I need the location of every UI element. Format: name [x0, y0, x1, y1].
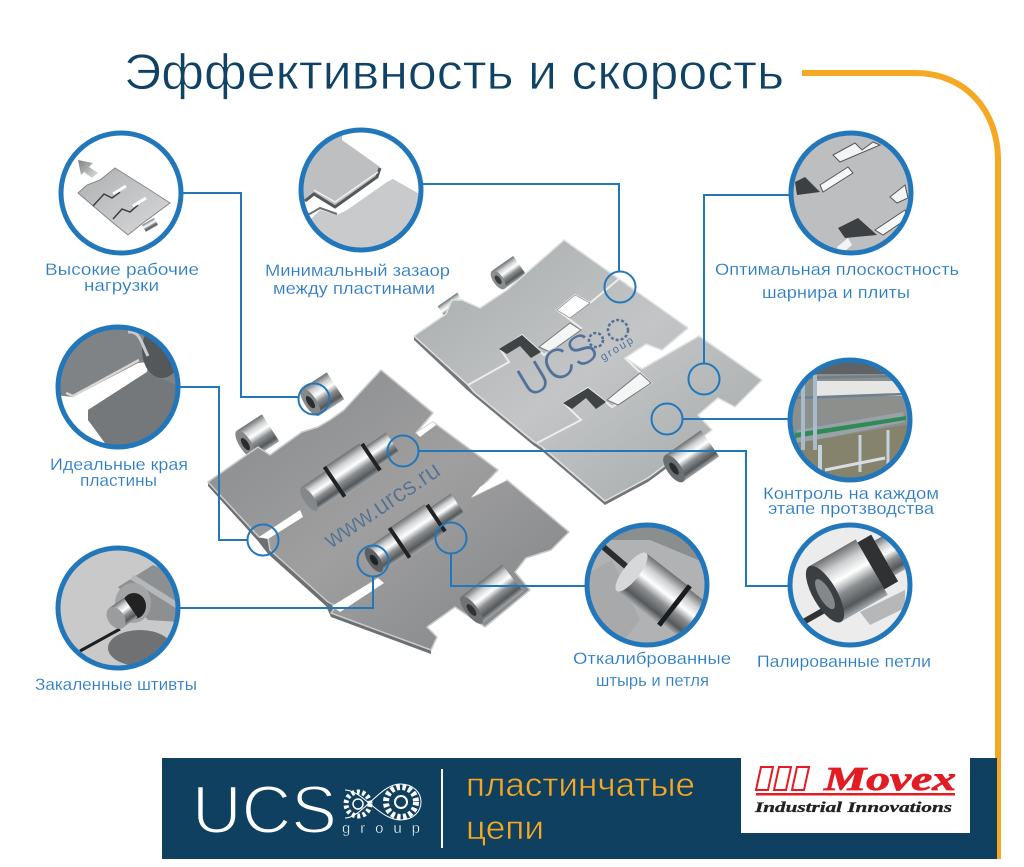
label: minimal gap: Минимальный зазаор [265, 261, 450, 280]
label: flatness: Оптимальная плоскостность [715, 260, 959, 279]
logo: Movex: Industrial Innovations [754, 800, 952, 816]
footer band [162, 757, 997, 859]
icon: perfect edges [55, 322, 182, 450]
label: minimal gap [265, 261, 450, 298]
plate silhouette [414, 240, 762, 501]
knuckle: right [297, 372, 344, 419]
label: polished loops: Палированные петли [757, 652, 931, 671]
knuckle: second [438, 293, 466, 319]
logo: Movex: Movex [823, 761, 956, 798]
label: hardened pins: Закаленные штивты [35, 675, 197, 694]
product title: пластинчатые [466, 766, 695, 803]
chain: left assembly [208, 370, 569, 654]
icon: factory line [785, 355, 915, 485]
label: high load: нагрузки [84, 276, 159, 295]
label: flatness: шарнира и плиты [762, 283, 910, 302]
logo: UCS group: group [342, 820, 420, 837]
icon: minimal gap [298, 128, 424, 252]
connector lines [180, 184, 789, 608]
product title [466, 766, 695, 846]
product title: цепи [466, 809, 544, 846]
chain: right assembly [414, 240, 762, 505]
hinge: bottom [456, 565, 523, 627]
white notch [557, 295, 590, 318]
watermark: url: www.urcs.ru [318, 456, 445, 555]
pin: top [295, 428, 403, 517]
plate silhouette [208, 370, 569, 650]
bevel shadow [414, 336, 690, 505]
bevel shadow [208, 482, 431, 654]
logo: UCS group [192, 772, 421, 848]
label: perfect edges: Идеальные края [50, 455, 188, 474]
dark gaps [499, 335, 541, 358]
divider [441, 769, 443, 848]
hinge: right [659, 430, 719, 486]
label: control: Контроль на каждом [763, 484, 939, 503]
pin: bottom [359, 489, 468, 578]
seam: back and middle plate [468, 278, 620, 385]
knuckle: top left [488, 256, 526, 292]
watermark: group: group [598, 334, 637, 364]
seam: middle and front plate [537, 358, 651, 443]
label: minimal gap: между пластинами [273, 279, 435, 298]
label: calibrated pin: Откалиброванные [573, 649, 731, 668]
small callout circles [248, 272, 720, 576]
icon: hardened pins [55, 545, 180, 670]
label: perfect edges: пластины [80, 471, 157, 490]
icon: polished loops [788, 522, 912, 648]
knuckle: left [232, 414, 279, 461]
label: high load [45, 260, 199, 295]
white pins [539, 323, 581, 352]
title: Эффективность и скорость [124, 44, 784, 100]
seam: white slits [259, 422, 507, 612]
watermark: UCS: UCS [509, 322, 606, 408]
logo: Movex [741, 757, 970, 833]
label: control [763, 484, 939, 518]
label: calibrated pin [573, 649, 731, 690]
icon: calibrated pin [584, 522, 710, 648]
label: calibrated pin: штырь и петля [596, 671, 709, 690]
logo: UCS group: UCS [192, 772, 337, 848]
icon: flatness [785, 128, 917, 258]
label: control: этапе протзводства [768, 499, 935, 518]
icon: high load chain [60, 130, 185, 255]
label: perfect edges [50, 455, 188, 490]
label: high load: Высокие рабочие [45, 260, 199, 279]
watermark: gears [589, 320, 628, 347]
orange frame line [802, 73, 998, 859]
label: flatness [715, 260, 959, 302]
